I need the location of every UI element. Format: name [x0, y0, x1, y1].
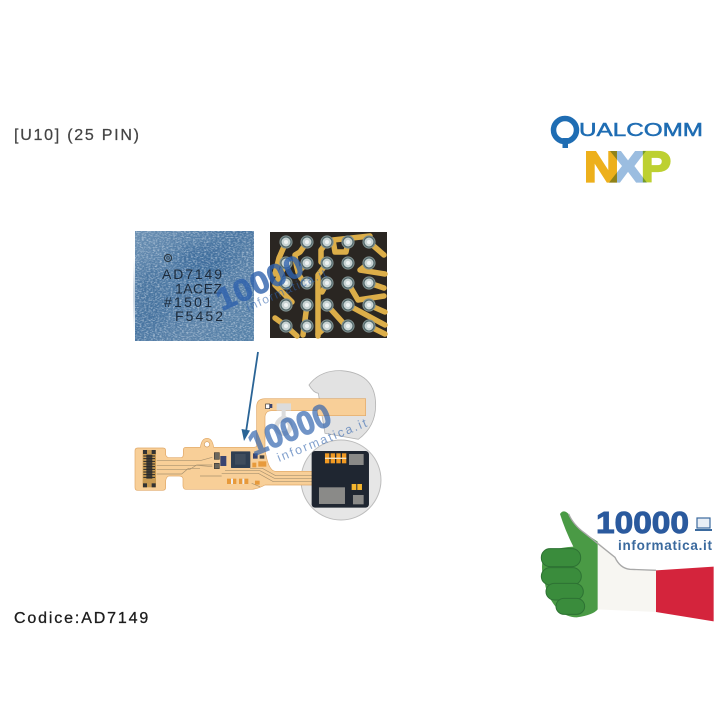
heading: part reference: [U10] (25 PIN): [14, 127, 141, 144]
watermark over chip photos: [211, 240, 330, 324]
mounting hole: [204, 442, 210, 447]
routed traces: [157, 457, 315, 487]
chip marking text: AD7149: [162, 266, 222, 282]
sensor module: [312, 451, 369, 508]
logo: Qualcomm: UALCOMM: [579, 119, 703, 140]
photo: chip underside with solder balls: [270, 232, 387, 338]
photo: chip top side with markings: [135, 231, 254, 341]
solder balls: [279, 235, 376, 333]
watermark over flex diagram: [243, 384, 371, 473]
icon: laptop: [695, 518, 712, 531]
top grey circle: [309, 371, 376, 439]
gold traces: [275, 236, 385, 336]
hand: Italian flag thumbs up: [541, 511, 714, 621]
ring hole: [279, 422, 288, 431]
red forearm band: [656, 567, 714, 621]
logo: NXP: [584, 144, 671, 192]
chip marking text: F5452: [175, 308, 223, 324]
logo: Qualcomm: [554, 118, 703, 148]
logo: NXP: X: [611, 144, 645, 192]
AD7149 IC on flex: [231, 451, 250, 468]
product code: Codice:AD7149: [14, 610, 150, 627]
bottom grey circle: [301, 440, 381, 520]
logo: 10000 informatica.it: [596, 505, 712, 553]
logo: NXP: N: [584, 144, 619, 192]
watermark over flex diagram: informatica.it: [275, 415, 371, 465]
watermark over flex diagram: 10000: [243, 396, 336, 462]
logo: NXP: P: [641, 144, 671, 192]
small components: [214, 404, 272, 485]
watermark over chip photos: informatica.it: [244, 266, 330, 314]
chip marking text: #1501: [164, 294, 212, 310]
arrow: from chip to flex position: [242, 352, 258, 441]
finger shadows: [541, 549, 585, 614]
chip marking text: [162, 266, 223, 324]
chip marking text: 1ACEZ: [175, 280, 222, 296]
connector: [143, 450, 156, 487]
outline shading: [569, 514, 656, 570]
logo: 10000 informatica.it: 10000: [596, 505, 689, 540]
bracket ring: [274, 403, 293, 436]
white hand band: [598, 542, 656, 612]
watermark over chip photos: 10000: [211, 248, 309, 317]
flex PCB outline: [135, 399, 366, 490]
green hand and thumb: [542, 511, 598, 617]
diagram: flex cable with sensor: [135, 371, 381, 520]
logo: 10000 informatica.it: informatica.it: [618, 538, 712, 553]
